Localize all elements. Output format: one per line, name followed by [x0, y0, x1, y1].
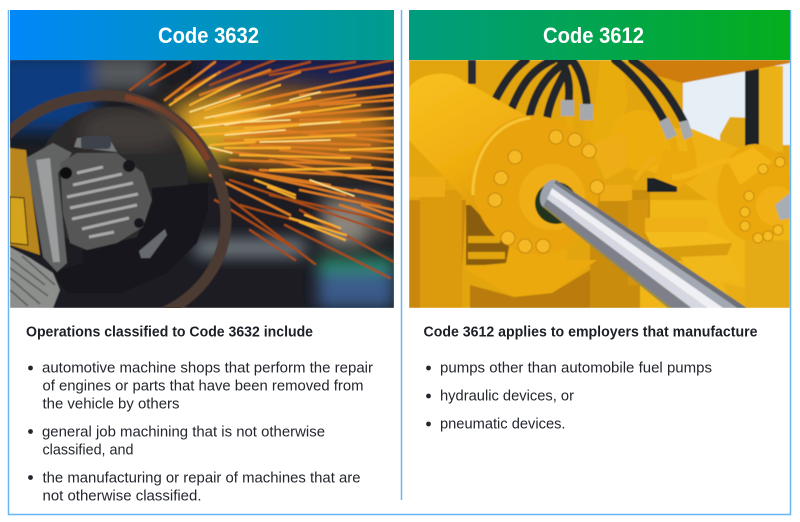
- intro text: Code 3612: Code 3612 applies to employers that manufacture: [424, 324, 758, 340]
- chrome piston rod: [536, 177, 747, 308]
- intro text: Code 3632: Operations classified to Code 3632 include: [26, 324, 313, 340]
- lower background: [640, 200, 790, 308]
- bullet list: Code 3632 operations: the manufacturing or repair of machines that are: [42, 470, 360, 486]
- mounting lug: [593, 132, 626, 180]
- shadow below bracket: [470, 270, 590, 308]
- black block behind valve: [647, 178, 677, 192]
- head ribs: [67, 167, 138, 237]
- rusty tube: [5, 95, 226, 312]
- black hydraulic hoses: [495, 60, 684, 122]
- bullet list: Code 3612 products: [426, 360, 712, 432]
- black hose at the far left: [468, 60, 476, 84]
- flange bolts: [488, 130, 604, 253]
- photo: yellow hydraulic cylinders: [409, 60, 796, 308]
- main cylinder flange: [478, 114, 600, 252]
- bullet list: Code 3632 operations: of engines or parts that have been removed from: [42, 378, 364, 394]
- bullet list: Code 3632 operations: [28, 360, 373, 504]
- bullet list: Code 3632 operations: classified, and: [42, 442, 134, 458]
- glow of sparks: [167, 82, 402, 174]
- sky and background beams: [683, 62, 790, 145]
- flange bolts on second cylinder: [740, 157, 785, 243]
- flange boss: [519, 164, 585, 230]
- stair plates: [644, 218, 744, 304]
- grinder head: [60, 153, 152, 250]
- glove: [10, 247, 60, 308]
- panel: Code 3632: [0, 10, 402, 504]
- safety guard: [90, 185, 202, 257]
- second cylinder: [645, 128, 739, 208]
- metal collar: [26, 143, 72, 272]
- heading bar: Code 3612: Code 3612: [543, 23, 644, 48]
- bullet list: Code 3632 operations: automotive machine shops that perform the repair: [42, 360, 373, 376]
- bullet list: Code 3632 operations: general job machining that is not otherwise: [42, 424, 325, 440]
- left machine frame and pipes: [409, 200, 466, 308]
- heading bar: Code 3612: [409, 10, 790, 60]
- second flange: [717, 144, 793, 242]
- valve block and small pipes: [654, 150, 698, 188]
- bullet list: Code 3612 products: pumps other than automobile fuel pumps: [440, 360, 712, 376]
- lower bracket: [484, 246, 596, 296]
- heading bar: Code 3632: Code 3632: [158, 23, 259, 48]
- main cylinder body: [409, 74, 530, 215]
- panel: Code 3612: [409, 10, 796, 432]
- bullet list: Code 3612 products: pneumatic devices.: [440, 416, 566, 432]
- hose fittings: [561, 100, 693, 140]
- bullet list: Code 3632 operations: not otherwise classified.: [42, 488, 202, 504]
- sparks: [130, 60, 394, 278]
- bullet list: Code 3632 operations: the vehicle by others: [42, 396, 180, 412]
- bullet list: Code 3612 products: hydraulic devices, or: [440, 388, 574, 404]
- yellow grinder body: [10, 148, 40, 255]
- photo: angle grinder throwing sparks: [0, 55, 402, 312]
- heading bar: Code 3632: [10, 10, 394, 60]
- grinding disc: [44, 108, 188, 240]
